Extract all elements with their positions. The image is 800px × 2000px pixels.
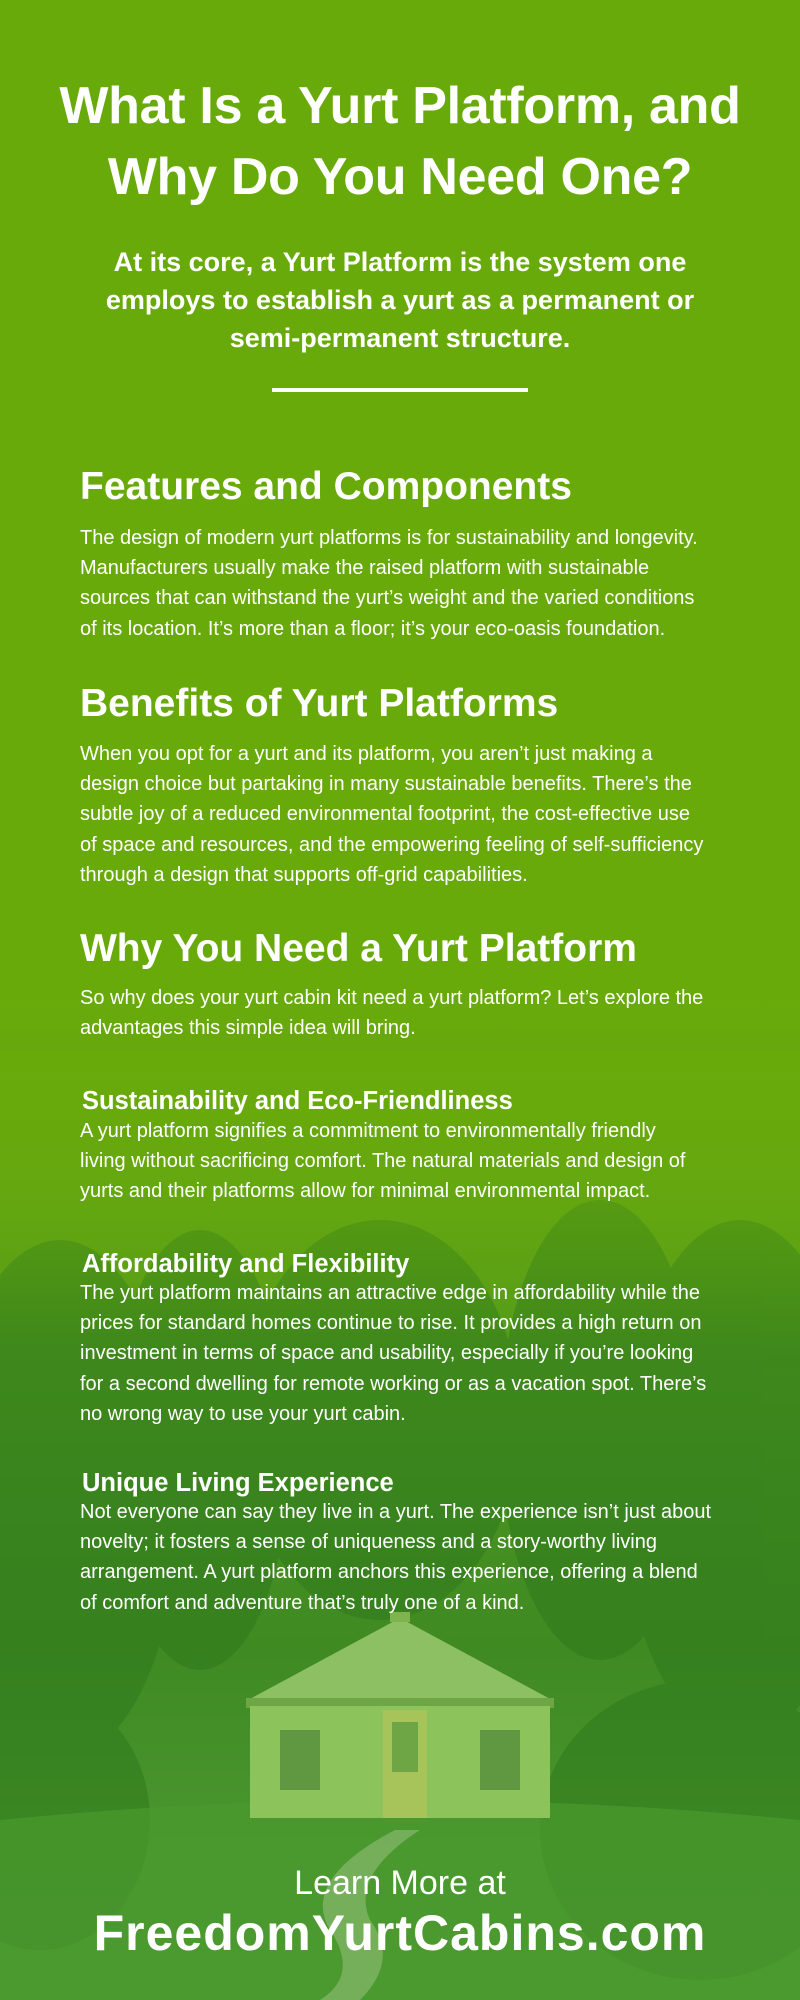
text: unique: arrangement. A yurt platform anchors this experience, offering a blend [80, 1561, 698, 1583]
footer: website: FreedomYurtCabins.com [94, 1905, 706, 1961]
text: why intro: So why does your yurt cabin kit need a yurt platform? Let’s explore the [80, 987, 703, 1009]
text: features [80, 527, 698, 640]
text: unique: novelty; it fosters a sense of uniqueness and a story-worthy living [80, 1531, 657, 1553]
subtitle [106, 247, 694, 353]
text: unique: of comfort and adventure that’s truly one of a kind. [80, 1592, 524, 1614]
subtitle: employs to establish a yurt as a permanent or [106, 285, 694, 315]
background forest and yurt illustration [0, 1202, 800, 2000]
text: benefits: design choice but partaking in many sustainable benefits. There’s the [80, 773, 692, 795]
text: why intro: advantages this simple idea will bring. [80, 1017, 416, 1039]
subheading: unique: Unique Living Experience [82, 1469, 394, 1497]
text: sustainability: living without sacrificing comfort. The natural materials and design of [80, 1150, 685, 1172]
text: benefits [80, 743, 704, 886]
text: features: of its location. It’s more than a floor; it’s your eco-oasis foundation. [80, 618, 665, 640]
heading: why: Why You Need a Yurt Platform [80, 927, 637, 970]
title: Why Do You Need One? [108, 148, 692, 206]
text: features: Manufacturers usually make the raised platform with sustainable [80, 557, 649, 579]
subtitle: At its core, a Yurt Platform is the system one [114, 247, 686, 277]
subheading: affordability: Affordability and Flexibility [82, 1250, 409, 1278]
subtitle: semi-permanent structure. [230, 323, 570, 353]
heading: features: Features and Components [80, 465, 572, 508]
text: sustainability [80, 1120, 686, 1202]
text: sustainability: yurts and their platforms allow for minimal environmental impact. [80, 1180, 650, 1202]
footer: learn more: Learn More at [294, 1864, 506, 1902]
text: affordability: investment in terms of space and usability, especially if you’re looking [80, 1342, 693, 1364]
text: affordability [80, 1282, 706, 1425]
text: features: The design of modern yurt platforms is for sustainability and longevity. [80, 527, 698, 549]
text: features: sources that can withstand the yurt’s weight and the varied conditions [80, 587, 694, 609]
text: benefits: through a design that supports off-grid capabilities. [80, 864, 528, 886]
divider [272, 388, 528, 392]
text: why intro [80, 987, 703, 1039]
title: What Is a Yurt Platform, and [59, 77, 741, 135]
subheading: sustainability: Sustainability and Eco-Friendliness [82, 1087, 513, 1115]
text: benefits: subtle joy of a reduced environmental footprint, the cost-effective use [80, 803, 690, 825]
text: affordability: for a second dwelling for remote working or as a vacation spot. There’s [80, 1373, 706, 1395]
text: affordability: no wrong way to use your yurt cabin. [80, 1403, 406, 1425]
text: affordability: prices for standard homes continue to rise. It provides a high return on [80, 1312, 701, 1334]
text: affordability: The yurt platform maintains an attractive edge in affordability while the [80, 1282, 700, 1304]
yurt image [246, 1612, 554, 1818]
text: unique [80, 1501, 711, 1614]
text: benefits: of space and resources, and the empowering feeling of self-sufficiency [80, 834, 703, 856]
text: unique: Not everyone can say they live in a yurt. The experience isn’t just about [80, 1501, 711, 1523]
text: benefits: When you opt for a yurt and its platform, you aren’t just making a [80, 743, 652, 765]
heading: benefits: Benefits of Yurt Platforms [80, 682, 558, 725]
text: sustainability: A yurt platform signifies a commitment to environmentally friendly [80, 1120, 656, 1142]
title [59, 77, 741, 206]
